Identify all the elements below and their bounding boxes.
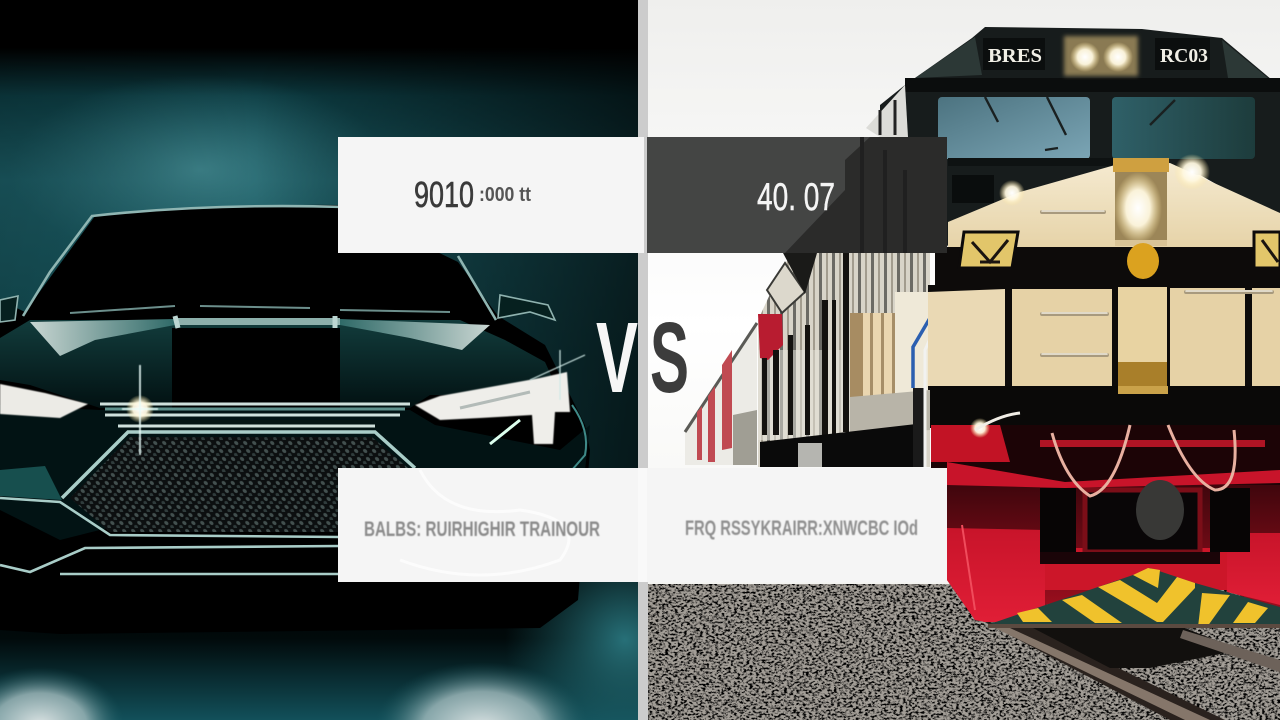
heading: VS: S	[650, 302, 689, 414]
coupler frame	[1040, 480, 1250, 564]
stat box: car figure: :000 tt	[479, 184, 531, 206]
destination board: left	[983, 38, 1045, 70]
stat box: train figure	[647, 137, 947, 253]
hood highlights	[30, 319, 175, 356]
ground: gravel ballast	[648, 584, 1280, 720]
hazard chevron stripes	[988, 568, 1280, 628]
panel: car side background	[0, 0, 638, 720]
windshields	[938, 97, 1090, 159]
destination board: right	[1155, 38, 1210, 70]
panel: train side background	[648, 0, 1280, 720]
heading: VS: V	[596, 302, 638, 414]
lower trim	[0, 498, 340, 574]
illustration: locomotive pilot	[930, 386, 1280, 628]
grille upper bars	[100, 404, 410, 426]
headlights	[1064, 36, 1138, 76]
side louvre hood	[767, 263, 805, 313]
black band	[935, 247, 1280, 287]
centre divider	[638, 0, 648, 720]
illustration: locomotive cab	[866, 27, 1280, 250]
grille mesh	[70, 437, 408, 532]
illustration: locomotive nose	[928, 154, 1280, 390]
lens flares	[126, 395, 154, 423]
fender curve	[572, 405, 586, 470]
caption box: car and train descriptions	[338, 468, 947, 582]
stat box: car figure	[338, 137, 644, 253]
red carriage stripes	[697, 350, 732, 462]
loco side with vents	[758, 253, 930, 467]
lower red skirt	[947, 482, 1280, 622]
illustration: train carriages	[685, 253, 951, 467]
stat box: car figure: 9010	[414, 174, 474, 215]
windshield outline	[23, 206, 496, 320]
hood	[0, 320, 560, 408]
lower cream panels	[928, 287, 1280, 388]
caption box: car and train descriptions: FRQ RSSYKRAIRR:XNWCBC IOd	[685, 517, 918, 540]
right headlight	[415, 372, 570, 444]
lower body	[0, 405, 590, 540]
mirrors	[498, 295, 555, 320]
blue grab rail	[913, 289, 947, 388]
flares on nose	[1174, 154, 1210, 190]
panel backing	[928, 285, 1280, 390]
warning plate: right	[1254, 232, 1280, 268]
car body silhouette	[0, 205, 590, 634]
centre light	[1113, 158, 1169, 279]
handles	[1042, 212, 1272, 355]
illustration: rail tracks	[985, 622, 1280, 720]
left headlight	[0, 384, 88, 418]
illustration: sports car front	[0, 205, 590, 634]
stat box: train figure: 40. 07	[757, 176, 835, 219]
warning plate: left	[959, 232, 1018, 268]
destination board: left: BRES	[988, 45, 1042, 67]
grille frame	[62, 432, 415, 498]
destination board: right: RC03	[1160, 45, 1208, 67]
air hoses	[1052, 425, 1235, 496]
caption box: car and train descriptions: BALBS: RUIRHIGHIR TRAINOUR	[364, 518, 600, 541]
